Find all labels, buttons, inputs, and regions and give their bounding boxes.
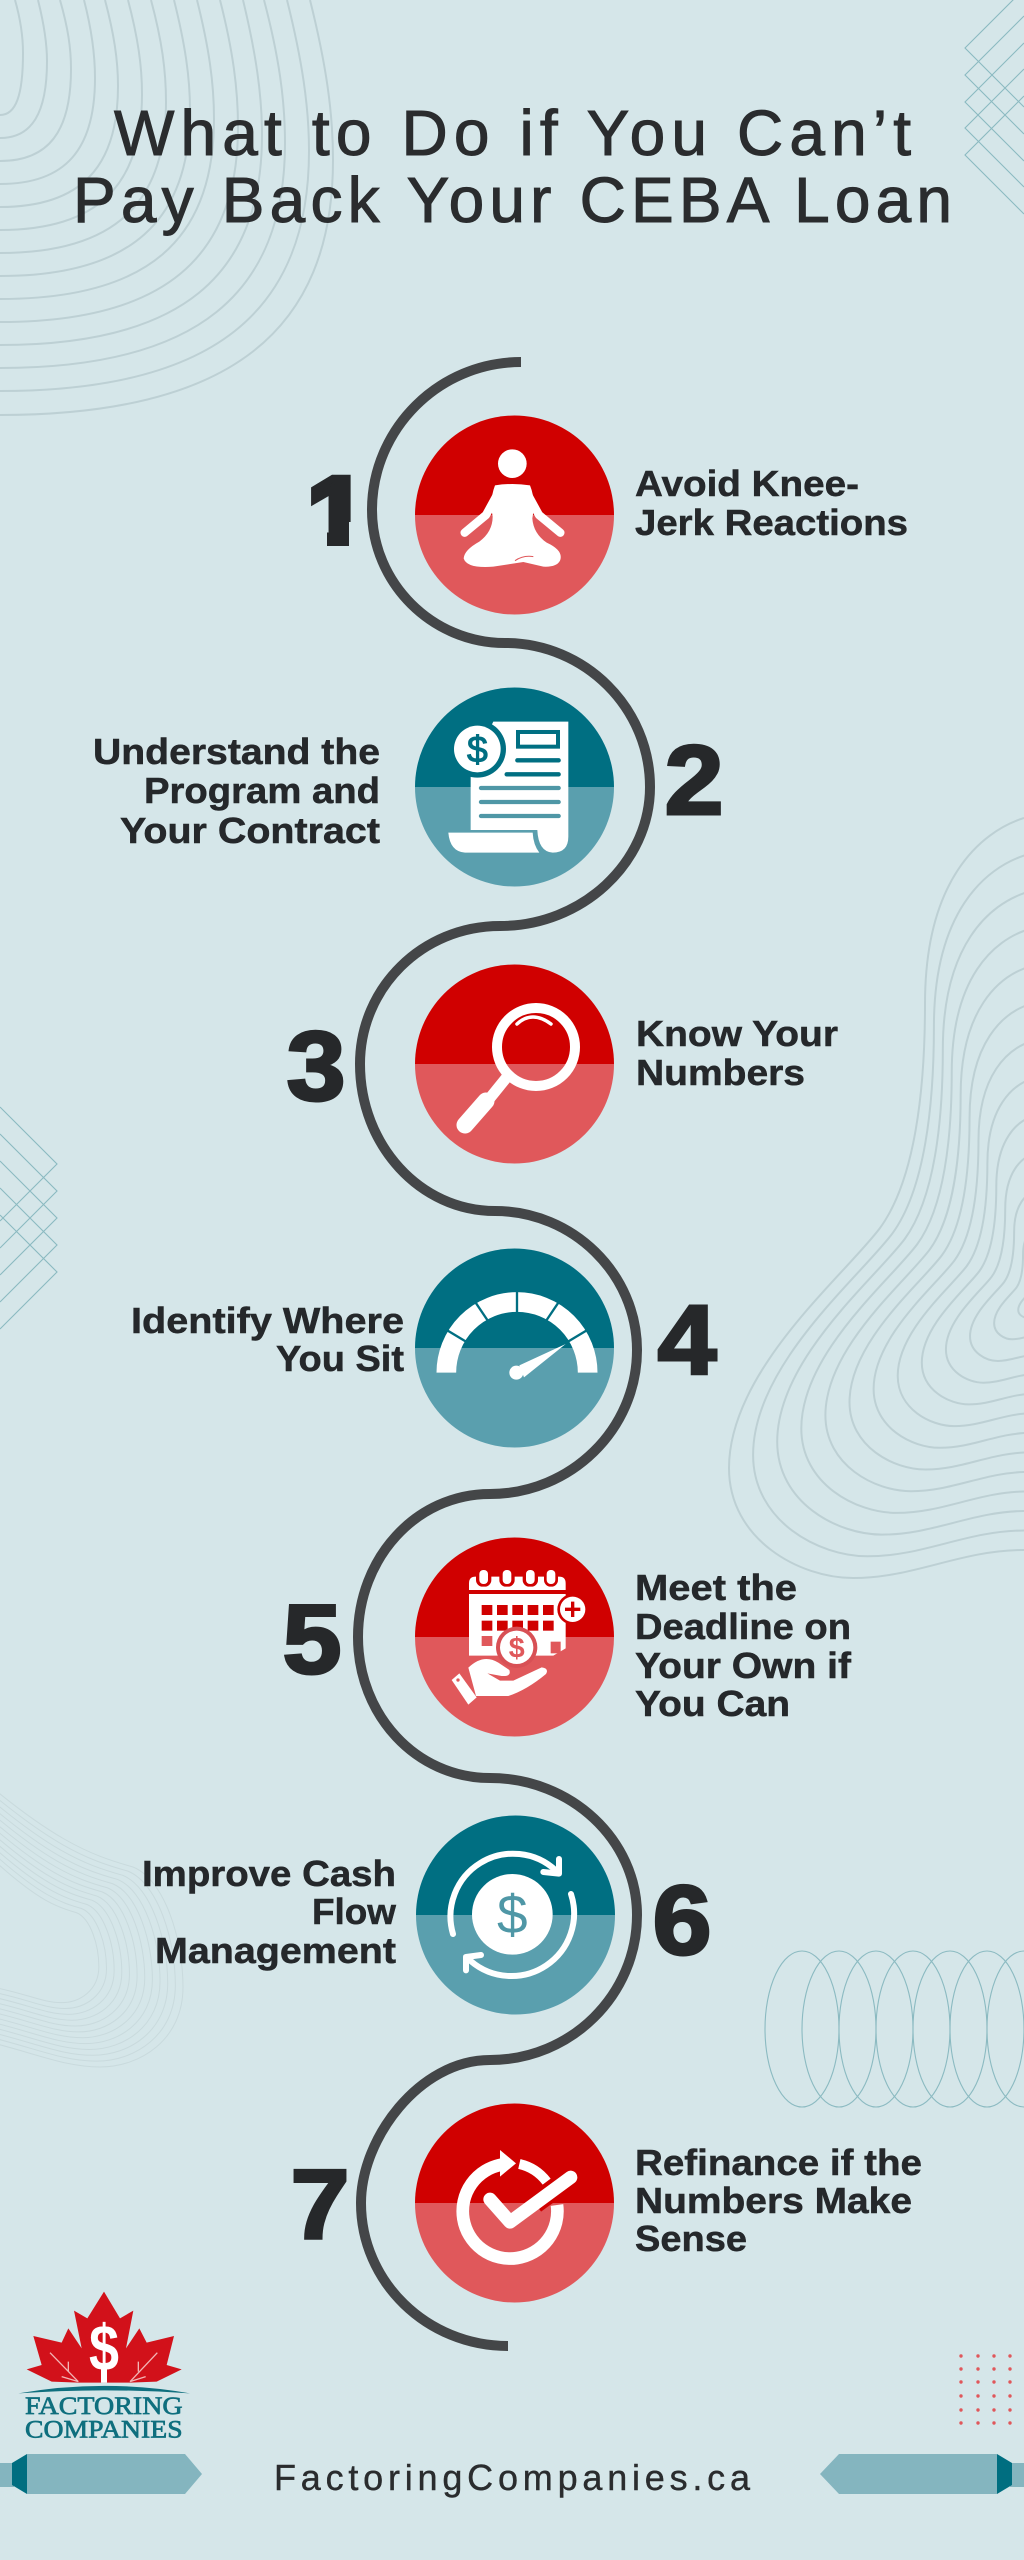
label 3: Numbers: [636, 1052, 805, 1093]
title: Pay Back Your CEBA Loan: [73, 164, 952, 236]
decoration: contour lines top left: [0, 0, 333, 415]
label 3: [636, 1013, 838, 1093]
number 5: 5: [283, 1585, 341, 1694]
logo: factoring companies: [18, 2292, 190, 2444]
label 4: Identify Where: [131, 1300, 404, 1341]
step 2: understand the program and your contract: [93, 687, 723, 887]
label 7: Sense: [635, 2218, 747, 2259]
maple leaf: [27, 2292, 182, 2383]
number 3: 3: [287, 1012, 345, 1121]
icon: magnifying glass: [465, 1008, 575, 1125]
icon: document with dollar: [448, 720, 568, 853]
label 1: Avoid Knee-: [635, 463, 859, 504]
icon: circular cash flow arrows: [450, 1854, 574, 1976]
label 5: Deadline on: [635, 1606, 851, 1647]
label 1: Jerk Reactions: [635, 502, 908, 543]
decoration: contour lines right: [729, 818, 1024, 1578]
label 2: Understand the: [93, 731, 380, 772]
label 2: [93, 731, 380, 851]
label 7: Numbers Make: [635, 2180, 912, 2221]
icon: speedometer gauge: [446, 1290, 588, 1380]
dollar sign: $: [89, 2311, 119, 2384]
number 6: 6: [653, 1866, 711, 1975]
label 5: You Can: [635, 1683, 790, 1724]
step 4: identify where you sit: [131, 1248, 717, 1448]
icon: calendar with coin in hand: [452, 1568, 588, 1705]
label 2: Program and: [144, 770, 380, 811]
icon: document with dollar: $: [467, 728, 488, 770]
label 5: Your Own if: [635, 1645, 852, 1686]
label 4: You Sit: [276, 1338, 404, 1379]
icon: meditating person: [464, 449, 561, 567]
title: What to Do if You Can’t: [114, 97, 911, 169]
step 7: refinance if the numbers make sense: [291, 2103, 922, 2303]
label 4: [131, 1300, 404, 1379]
number 1: 1: [308, 458, 366, 567]
number 7: 7: [291, 2150, 349, 2259]
step 1: avoid knee-jerk reactions: [308, 415, 908, 615]
footer tab right: [820, 2454, 1024, 2494]
label 7: [635, 2142, 922, 2259]
label 2: Your Contract: [120, 810, 380, 851]
label 5: [635, 1567, 852, 1724]
label 3: Know Your: [636, 1013, 838, 1054]
circle badge 1: [415, 415, 615, 615]
decoration: diamond lattice top right: [965, 0, 1024, 214]
stem: [101, 2368, 107, 2383]
label 6: Improve Cash: [142, 1853, 396, 1894]
label 5: Meet the: [635, 1567, 797, 1608]
label 6: Management: [155, 1930, 396, 1971]
footer tab left: [0, 2454, 202, 2494]
leaf veins: [50, 2353, 157, 2382]
circle badge 3: [415, 964, 615, 1164]
label 6: [142, 1853, 397, 1971]
circle badge 5: [415, 1537, 615, 1737]
circle badge 2: [415, 687, 615, 887]
icon: refresh circle with checkmark: [463, 2150, 572, 2259]
number 4: 4: [658, 1286, 717, 1395]
label 1: [635, 463, 908, 543]
decoration: overlapping ovals right: [765, 1951, 1024, 2107]
circle badge 6: [416, 1815, 616, 2015]
title: [73, 97, 952, 236]
circle badge 7: [415, 2103, 615, 2303]
step 3: know your numbers: [287, 964, 838, 1164]
swoosh: [18, 2386, 190, 2393]
label 7: Refinance if the: [635, 2142, 922, 2183]
logo wordmark: COMPANIES: [25, 2416, 183, 2444]
icon: circular cash flow arrows: $: [497, 1883, 528, 1945]
decoration: faint contour lines bottom left: [0, 1760, 183, 2067]
footer url: FactoringCompanies.ca: [274, 2457, 751, 2498]
winding path connector: [358, 362, 650, 2346]
step 6: improve cash flow management: [142, 1815, 711, 2015]
decoration: diamond lattice left: [0, 1107, 57, 1329]
logo wordmark: FACTORING: [25, 2392, 183, 2420]
decoration: red dot grid: [959, 2354, 1012, 2425]
icon: calendar with coin in hand: $: [509, 1633, 525, 1665]
number 2: 2: [665, 726, 723, 835]
logo wordmark: [25, 2392, 183, 2444]
label 6: Flow: [312, 1891, 397, 1932]
circle badge 4: [415, 1248, 615, 1448]
step 5: meet the deadline: [283, 1537, 852, 1737]
